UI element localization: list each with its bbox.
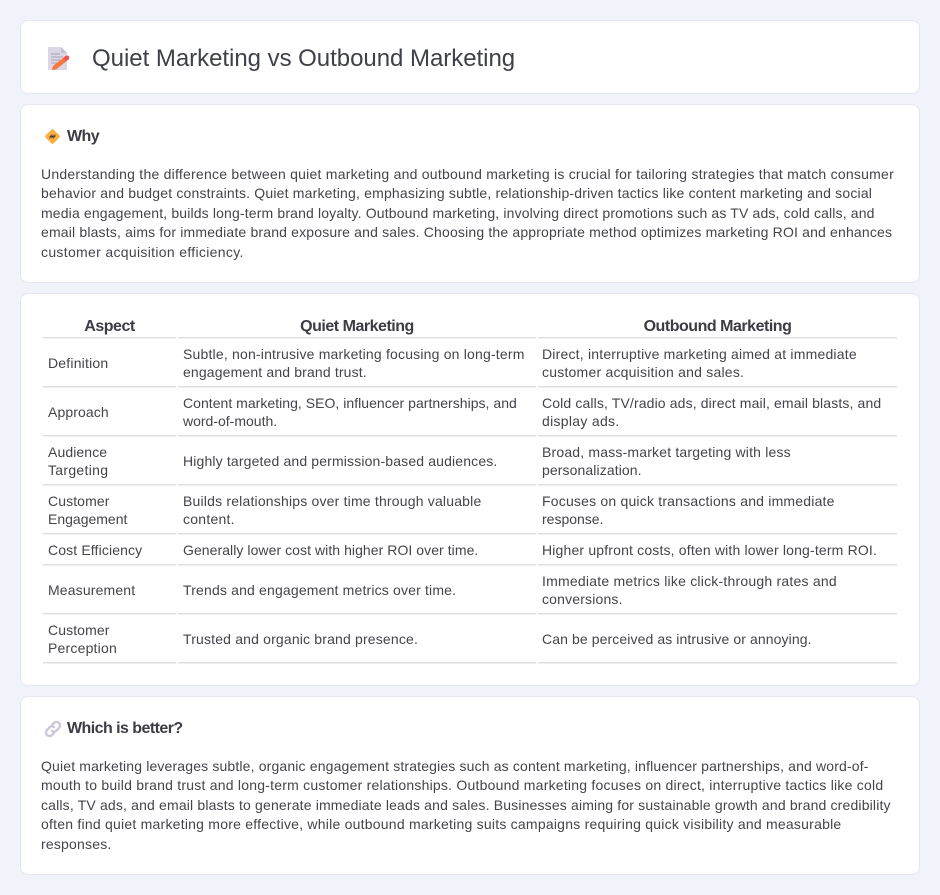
text block: why paragraph: media engagement, builds long-term brand loyalty. Outbound marketing, involving direct promotions such as TV ads, cold calls, and — [41, 205, 875, 221]
icon: document with pencil — [48, 47, 70, 70]
heading: which is better: Which is better? — [67, 720, 183, 737]
text block: which is better paragraph: mouth to build brand trust and long-term customer relationships. Outbound marketing focuses on direct, interruptive tactics like cold — [41, 777, 883, 793]
row: audience targeting: Targeting — [48, 462, 108, 478]
row: audience targeting: personalization. — [542, 462, 642, 478]
row: measurement — [48, 573, 837, 607]
row: audience targeting: Audience — [48, 444, 107, 460]
text block: why paragraph: Understanding the difference between quiet marketing and outbound marketing is crucial for tailoring strategies that match consumer — [41, 166, 894, 182]
row: approach: Content marketing, SEO, influencer partnerships, and — [183, 395, 517, 411]
text block: why paragraph: customer acquisition efficiency. — [41, 244, 244, 260]
panel: why — [20, 104, 920, 283]
row: definition: Direct, interruptive marketing aimed at immediate — [542, 346, 857, 362]
text block: why paragraph: email blasts, aims for immediate brand exposure and sales. Choosing the appropriate method optimizes marketing ROI and enhances — [41, 224, 892, 240]
row: customer engagement: Customer — [48, 493, 109, 509]
panel: header — [20, 20, 920, 94]
row: definition — [48, 346, 857, 380]
row: customer engagement: response. — [542, 511, 603, 527]
row: customer engagement: Engagement — [48, 511, 127, 527]
row: measurement: Trends and engagement metrics over time. — [183, 582, 456, 598]
row: customer engagement — [48, 493, 835, 527]
row: approach: display ads. — [542, 413, 620, 429]
panel: which is better — [20, 696, 920, 875]
row: measurement: Measurement — [48, 582, 135, 598]
row: audience targeting: Broad, mass-market targeting with less — [542, 444, 791, 460]
text block: why paragraph: behavior and budget constraints. Quiet marketing, emphasizing subtle, relationship-driven tactics like content marketing and social — [41, 185, 872, 201]
row: cost efficiency — [48, 542, 877, 558]
row: measurement: conversions. — [542, 591, 623, 607]
title: Quiet Marketing vs Outbound Marketing — [92, 45, 515, 72]
row: cost efficiency: Higher upfront costs, often with lower long-term ROI. — [542, 542, 877, 558]
row: customer perception: Customer — [48, 622, 109, 638]
row: approach: Cold calls, TV/radio ads, direct mail, email blasts, and — [542, 395, 881, 411]
row: definition: customer acquisition and sales. — [542, 364, 744, 380]
row: definition: engagement and brand trust. — [183, 364, 367, 380]
table header — [84, 318, 791, 335]
row: approach: word-of-mouth. — [183, 413, 277, 429]
row: cost efficiency: Generally lower cost with higher ROI over time. — [183, 542, 478, 558]
row: customer perception: Can be perceived as intrusive or annoying. — [542, 631, 812, 647]
row: measurement: Immediate metrics like click-through rates and — [542, 573, 837, 589]
text block: why paragraph — [41, 166, 894, 260]
row: definition: Definition — [48, 355, 108, 371]
row: customer perception — [48, 622, 812, 656]
icon: chain link — [44, 720, 62, 738]
table header: Quiet Marketing — [300, 318, 414, 335]
panel: comparison table — [20, 293, 920, 686]
text block: which is better paragraph: Quiet marketing leverages subtle, organic engagement strategies such as content marketing, influencer partnerships, and word-of- — [41, 758, 869, 774]
table header: Aspect — [84, 318, 135, 335]
row: approach — [48, 395, 881, 429]
text block: which is better paragraph: often find quiet marketing more effective, while outbound marketing suits campaigns requiring quick visibility and measurable — [41, 816, 841, 832]
row: customer engagement: content. — [183, 511, 235, 527]
row: approach: Approach — [48, 404, 109, 420]
icon: warning diamond — [45, 129, 60, 144]
row: audience targeting: Highly targeted and permission-based audiences. — [183, 453, 497, 469]
row: customer engagement: Builds relationships over time through valuable — [183, 493, 481, 509]
text block: which is better paragraph — [41, 758, 891, 852]
table header: Outbound Marketing — [644, 318, 791, 335]
text block: which is better paragraph: calls, TV ads, and email blasts to generate immediate leads and sales. Businesses aiming for sustainable growth and brand credibility — [41, 797, 891, 813]
row: definition: Subtle, non-intrusive marketing focusing on long-term — [183, 346, 525, 362]
row: audience targeting — [48, 444, 791, 478]
row: customer perception: Trusted and organic brand presence. — [183, 631, 418, 647]
heading: why: Why — [67, 128, 99, 145]
text block: which is better paragraph: responses. — [41, 836, 111, 852]
row: customer engagement: Focuses on quick transactions and immediate — [542, 493, 835, 509]
row: customer perception: Perception — [48, 640, 117, 656]
row: cost efficiency: Cost Efficiency — [48, 542, 142, 558]
